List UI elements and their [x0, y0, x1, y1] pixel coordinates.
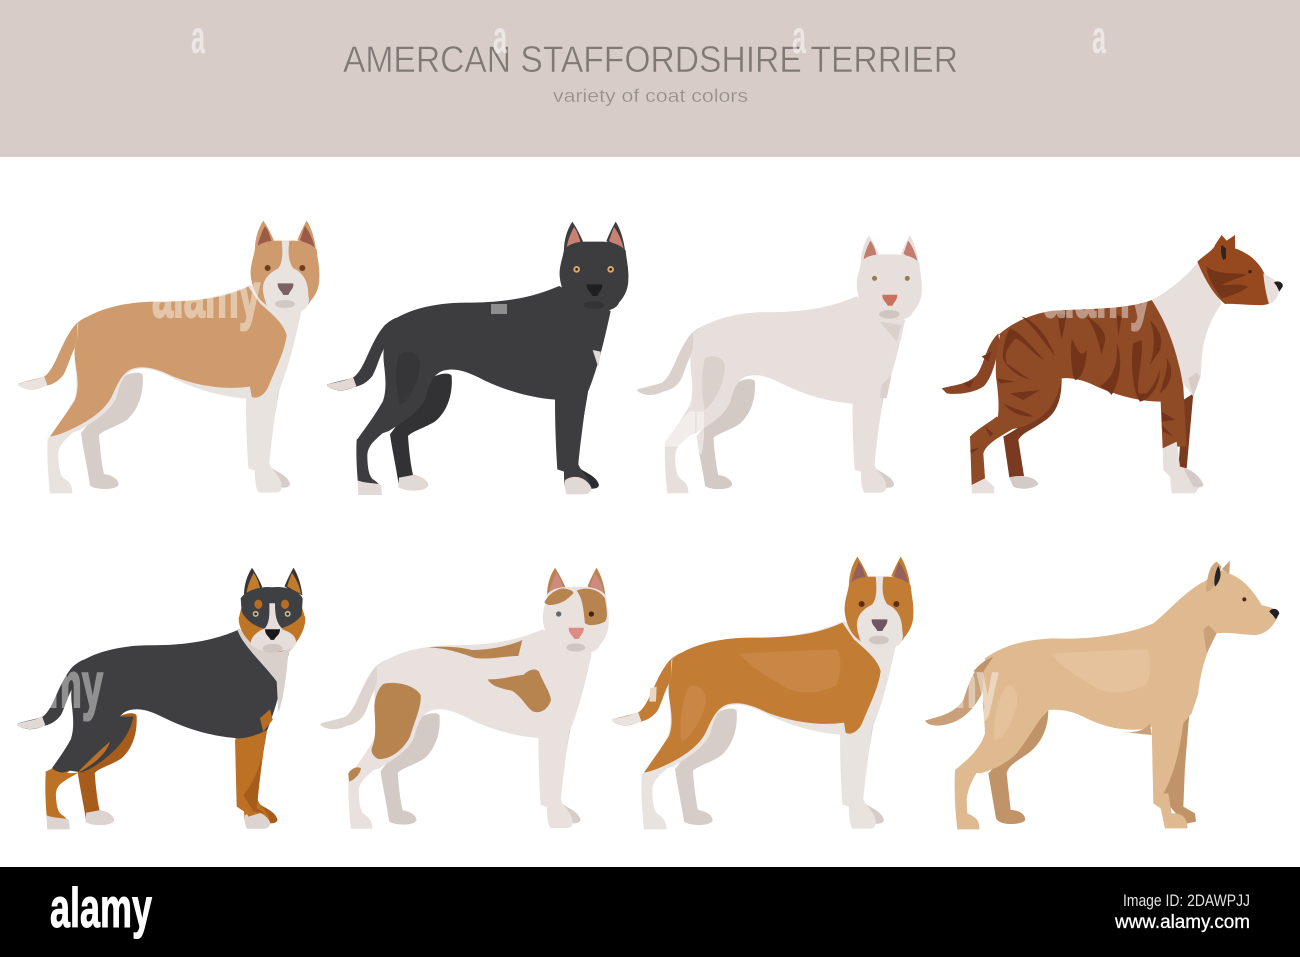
tail — [942, 333, 1000, 394]
title: AMERCAN STAFFORDSHIRE TERRIER — [343, 38, 958, 80]
dog 8: fawn profile — [925, 561, 1279, 829]
header watermarks: a — [792, 11, 806, 63]
head — [239, 607, 305, 652]
subtitle: variety of coat colors — [553, 85, 748, 106]
footer bar — [0, 867, 1300, 957]
header watermarks: a — [493, 11, 507, 63]
dog 6: white with brown patches — [321, 568, 609, 829]
header band — [0, 0, 1300, 157]
stripes — [963, 313, 1175, 453]
white socks — [1163, 442, 1202, 493]
leg watermark fragment — [665, 412, 704, 455]
watermark: alamy over dogs: alamy — [0, 649, 103, 721]
white neck — [1152, 263, 1222, 397]
dog 7: red and white — [612, 557, 913, 829]
dog 2: black — [327, 222, 628, 495]
header watermarks — [191, 11, 1106, 63]
dog 5: black and tan tricolor — [18, 568, 305, 829]
dog 3: white — [637, 236, 922, 493]
watermark: alamy over dogs — [0, 259, 1151, 721]
brown patches — [428, 640, 522, 659]
footer logo: alamy — [50, 876, 152, 939]
head — [1197, 235, 1269, 305]
image id: Image ID: 2DAWPJJ — [1123, 891, 1250, 910]
header watermarks: a — [191, 11, 205, 63]
header watermarks: a — [1092, 11, 1106, 63]
website: www.alamy.com — [1114, 912, 1250, 933]
watermark: alamy over dogs: alamy — [1043, 259, 1151, 331]
dog 4: brindle with white neck — [942, 235, 1283, 493]
watermark: alamy over dogs: alamy — [890, 649, 998, 721]
dog 1: fawn and white — [18, 221, 319, 493]
watermark: alamy over dogs: alamy — [152, 259, 260, 331]
